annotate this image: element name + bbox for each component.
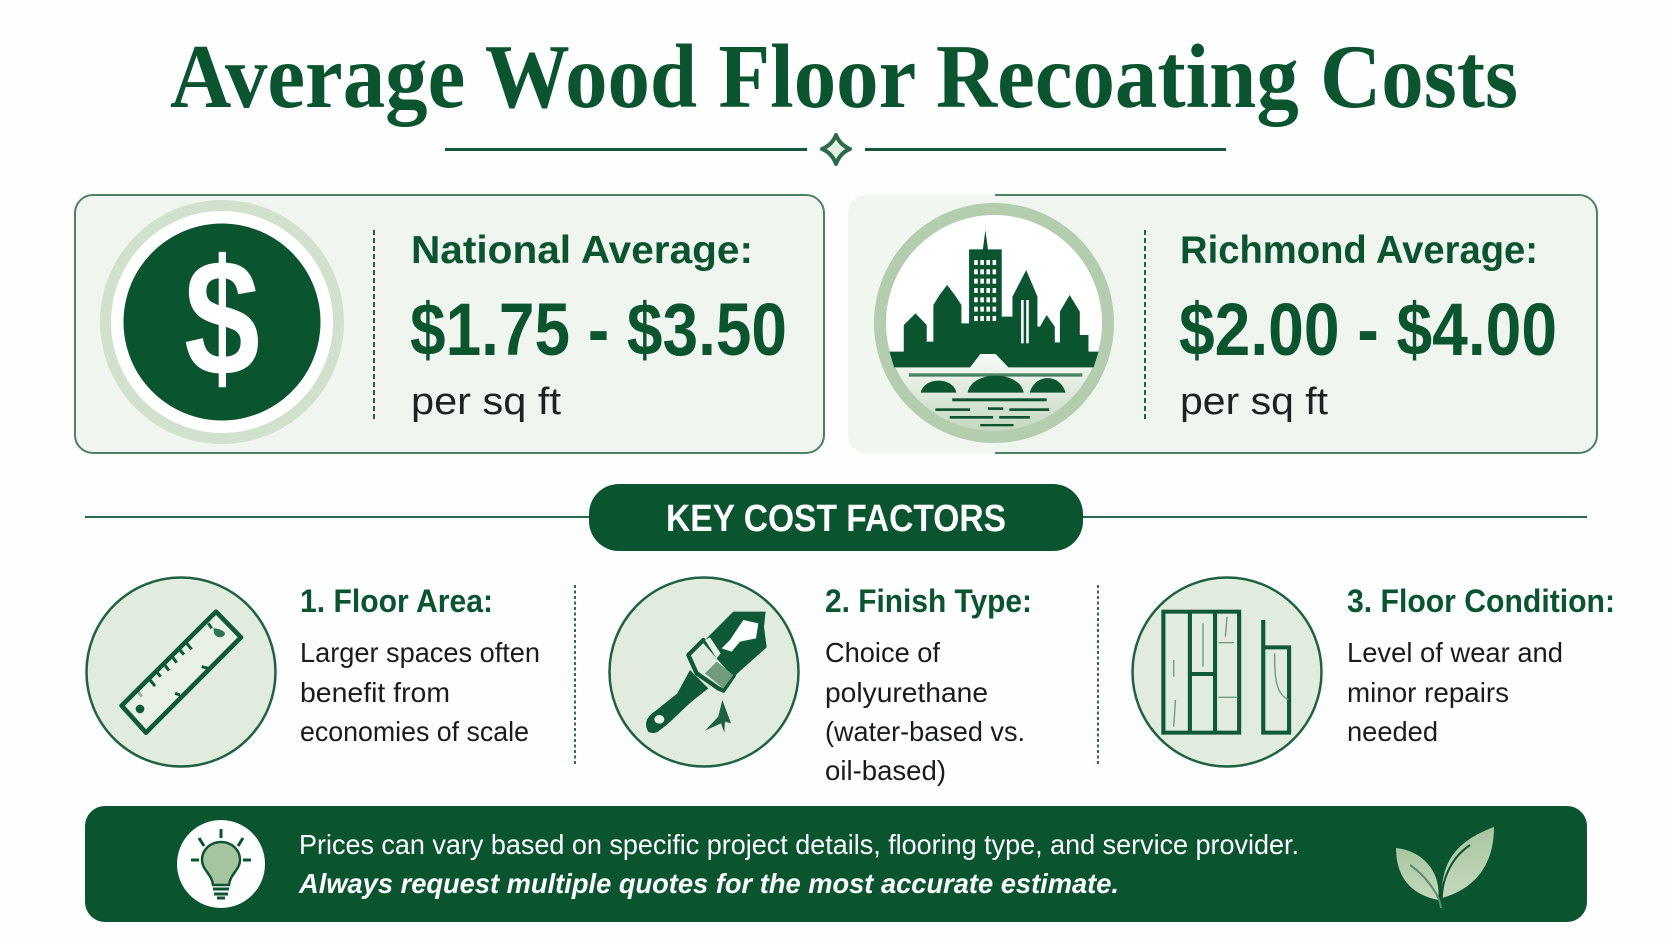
factor 1 description: benefit from <box>300 677 450 708</box>
icon: light bulb <box>177 820 265 908</box>
factor 1 description: economies of scale <box>300 716 529 747</box>
factor 3 description: Level of wear and <box>1347 637 1563 668</box>
icon: ruler <box>86 578 276 766</box>
factor 2 description: Choice of <box>825 637 940 668</box>
factor 2 description: oil-based) <box>825 755 946 786</box>
key cost factors heading pill <box>589 484 1083 551</box>
richmond average label: Richmond Average: <box>1180 229 1538 272</box>
panel: richmond average <box>848 195 1597 453</box>
icon: paint brush <box>610 578 798 766</box>
national average label: National Average: <box>411 229 753 272</box>
note emphasis: Always request multiple quotes for the most accurate estimate. <box>298 868 1119 899</box>
factor 3 heading: 3. Floor Condition: <box>1347 583 1615 619</box>
factor 1 description <box>300 637 540 747</box>
icon: richmond skyline <box>874 203 1114 443</box>
factor 2 heading: 2. Finish Type: <box>825 583 1032 619</box>
note text: Prices can vary based on specific project details, flooring type, and service provider. <box>299 829 1299 860</box>
factor 2: finish type <box>610 578 1032 786</box>
bottom note banner <box>85 806 1587 922</box>
panel: national average <box>75 195 824 453</box>
factor 1 description: Larger spaces often <box>300 637 540 668</box>
key cost factors heading pill: KEY COST FACTORS <box>666 498 1006 540</box>
richmond price range: $2.00 - $4.00 <box>1179 288 1557 371</box>
national unit: per sq ft <box>411 381 561 423</box>
icon: floor planks <box>1132 578 1322 766</box>
factor 2 description <box>825 637 1025 786</box>
icon: leaves <box>1396 827 1494 908</box>
factor 2 description: (water-based vs. <box>825 716 1025 747</box>
title divider with diamond ornament <box>445 135 1226 164</box>
richmond unit: per sq ft <box>1180 381 1328 423</box>
icon: dollar coin <box>100 200 344 444</box>
national price range: $1.75 - $3.50 <box>410 288 787 371</box>
factor 3 description <box>1347 637 1563 747</box>
factor 3: floor condition <box>1132 578 1615 766</box>
icon: dollar coin: $ <box>184 226 260 411</box>
factor 3 description: minor repairs <box>1347 677 1509 708</box>
factor 1: floor area <box>86 578 540 766</box>
factor 3 description: needed <box>1347 716 1438 747</box>
factor 2 description: polyurethane <box>825 677 988 708</box>
section rule behind heading <box>85 516 1587 518</box>
factor 1 heading: 1. Floor Area: <box>300 583 493 619</box>
title: Average Wood Floor Recoating Costs <box>170 26 1518 127</box>
